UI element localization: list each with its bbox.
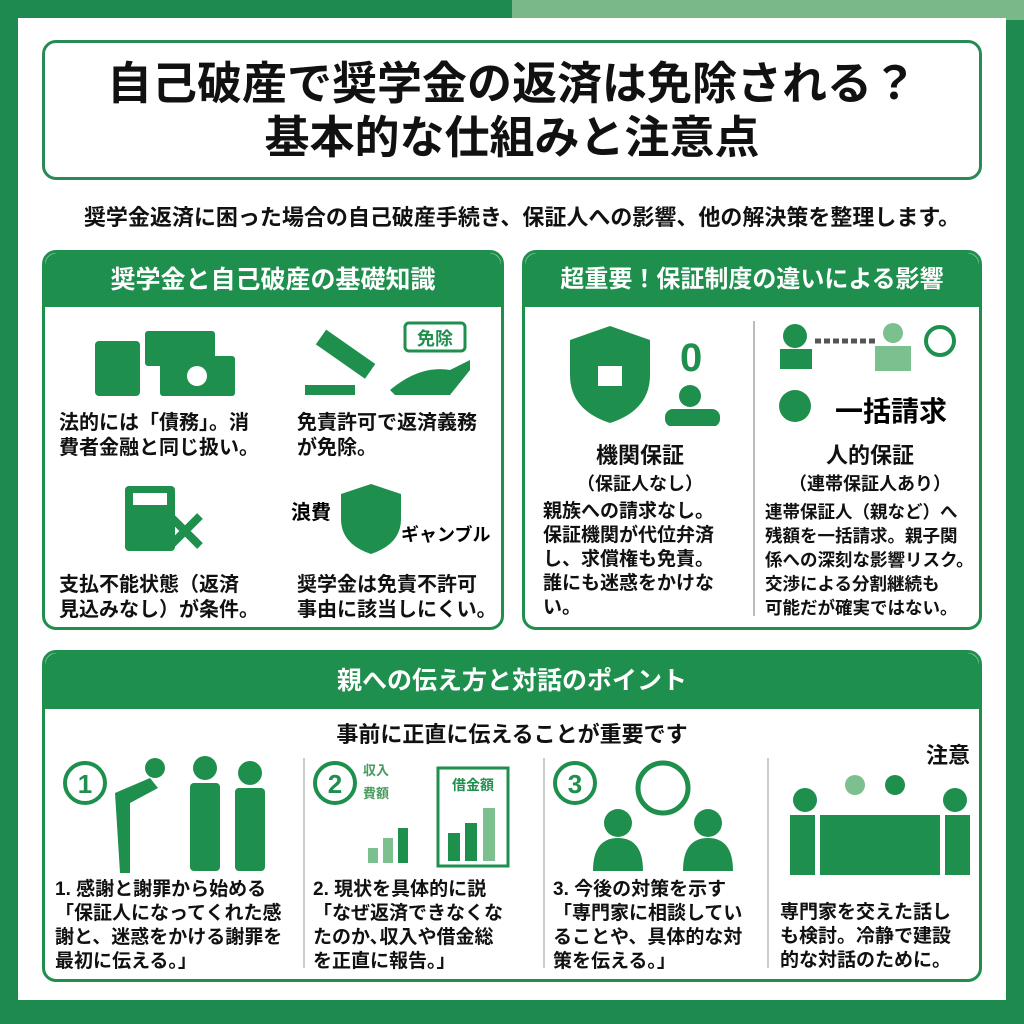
panel: guarantee: 連帯保証人（親など）へ bbox=[765, 502, 958, 522]
text: non-discharge: 奨学金は免責不許可 bbox=[297, 574, 477, 596]
note: 的な対話のために。 bbox=[780, 950, 951, 971]
icon: shield zero: 0 bbox=[680, 336, 702, 380]
text: insolvency: 見込みなし）が条件。 bbox=[59, 599, 259, 621]
step 3: 3. 今後の対策を示す bbox=[553, 879, 726, 900]
icon: gavel hand exemption: 免除 bbox=[417, 328, 453, 349]
step 3: 「専門家に相談してい bbox=[553, 903, 742, 924]
panel: basics bbox=[42, 250, 504, 630]
step 3: 3 bbox=[568, 769, 582, 799]
text: personal bbox=[789, 443, 951, 494]
text: non-discharge bbox=[297, 574, 497, 621]
panel: guarantee: 係への深刻な影響リスク。 bbox=[765, 550, 974, 570]
panel: guarantee: 誰にも迷惑をかけな bbox=[543, 573, 714, 594]
title: 基本的な仕組みと注意点 bbox=[264, 112, 760, 163]
note: 専門家を交えた話し bbox=[780, 902, 951, 923]
icon: chain persons bbox=[779, 323, 956, 426]
text: institutional: 機関保証 bbox=[596, 443, 684, 468]
heading: basics: 奨学金と自己破産の基礎知識 bbox=[110, 266, 436, 294]
icon: gavel hand exemption bbox=[305, 322, 470, 395]
note: も検討。冷静で建設 bbox=[780, 926, 951, 947]
text: legal: 法的には「債務」。消 bbox=[59, 412, 249, 434]
step 2: 収入 bbox=[363, 763, 389, 778]
text: discharge: が免除。 bbox=[297, 437, 377, 459]
text: institutional bbox=[577, 443, 703, 494]
panel: guarantee: い。 bbox=[543, 597, 581, 618]
note: 注意 bbox=[926, 743, 970, 768]
icon: shield zero bbox=[570, 326, 720, 426]
step 2: 借金額 bbox=[452, 777, 494, 793]
icon: shield waste gamble: 浪費 bbox=[291, 501, 331, 524]
step 3 bbox=[553, 760, 742, 972]
heading: guarantee bbox=[525, 253, 979, 307]
heading: basics bbox=[45, 253, 501, 307]
panel: guarantee: 残額を一括請求。親子関 bbox=[765, 526, 958, 546]
text: legal bbox=[59, 412, 259, 459]
panel: guarantee: 交渉による分割継続も bbox=[765, 574, 939, 594]
text: discharge: 免責許可で返済義務 bbox=[297, 412, 477, 434]
panel: guarantee bbox=[522, 250, 982, 630]
icon: gavel book money bbox=[95, 331, 235, 396]
title: 自己破産で奨学金の返済は免除される？ bbox=[107, 58, 917, 109]
step 1: 謝と、迷惑をかける謝罪を bbox=[55, 927, 282, 948]
step 1: 「保証人になってくれた感 bbox=[55, 903, 281, 924]
step 2: を正直に報告。」 bbox=[313, 951, 456, 972]
icon: shield waste gamble bbox=[291, 484, 490, 554]
step 1: 最初に伝える。」 bbox=[55, 951, 197, 972]
text: insolvency: 支払不能状態（返済 bbox=[59, 574, 239, 596]
step 3: ることや、具体的な対 bbox=[553, 927, 742, 948]
heading: talking: 親への伝え方と対話のポイント bbox=[337, 667, 687, 695]
heading: talking bbox=[45, 653, 979, 709]
step 2: 2 bbox=[328, 769, 342, 799]
text: non-discharge: 事由に該当しにくい。 bbox=[297, 599, 497, 621]
icon: shield waste gamble: ギャンブル bbox=[401, 524, 490, 545]
step 1: 1 bbox=[78, 769, 92, 799]
title bbox=[42, 40, 982, 180]
step 1 bbox=[55, 756, 282, 972]
step 2: 費額 bbox=[363, 786, 389, 801]
heading: guarantee: 超重要！保証制度の違いによる影響 bbox=[560, 266, 944, 293]
step 2 bbox=[313, 761, 510, 972]
text: personal: 人的保証 bbox=[826, 443, 914, 468]
note bbox=[780, 743, 970, 971]
icon: calculator x bbox=[125, 486, 203, 551]
step 2: 2. 現状を具体的に説 bbox=[313, 879, 486, 900]
text: legal: 費者金融と同じ扱い。 bbox=[59, 437, 259, 459]
panel: talking to parents: 事前に正直に伝えることが重要です bbox=[336, 722, 688, 747]
panel: talking to parents bbox=[42, 650, 982, 982]
step 2: 「なぜ返済できなくな bbox=[313, 903, 503, 924]
step 1: 1. 感謝と謝罪から始める bbox=[55, 879, 266, 900]
step 2: たのか､収入や借金総 bbox=[313, 927, 494, 948]
panel: guarantee: 保証機関が代位弁済 bbox=[543, 525, 714, 546]
text: institutional: （保証人なし） bbox=[577, 474, 703, 494]
panel: guarantee: 親族への請求なし。 bbox=[543, 501, 714, 522]
panel: guarantee: 可能だが確実ではない。 bbox=[765, 598, 958, 618]
step 3: 策を伝える。」 bbox=[553, 951, 676, 972]
text: discharge bbox=[297, 412, 477, 459]
subtitle: 奨学金返済に困った場合の自己破産手続き、保証人への影響、他の解決策を整理します。 bbox=[84, 205, 960, 230]
text: personal: （連帯保証人あり） bbox=[789, 474, 951, 494]
text: insolvency bbox=[59, 574, 259, 621]
panel: guarantee: し、求償権も免責。 bbox=[543, 549, 714, 570]
